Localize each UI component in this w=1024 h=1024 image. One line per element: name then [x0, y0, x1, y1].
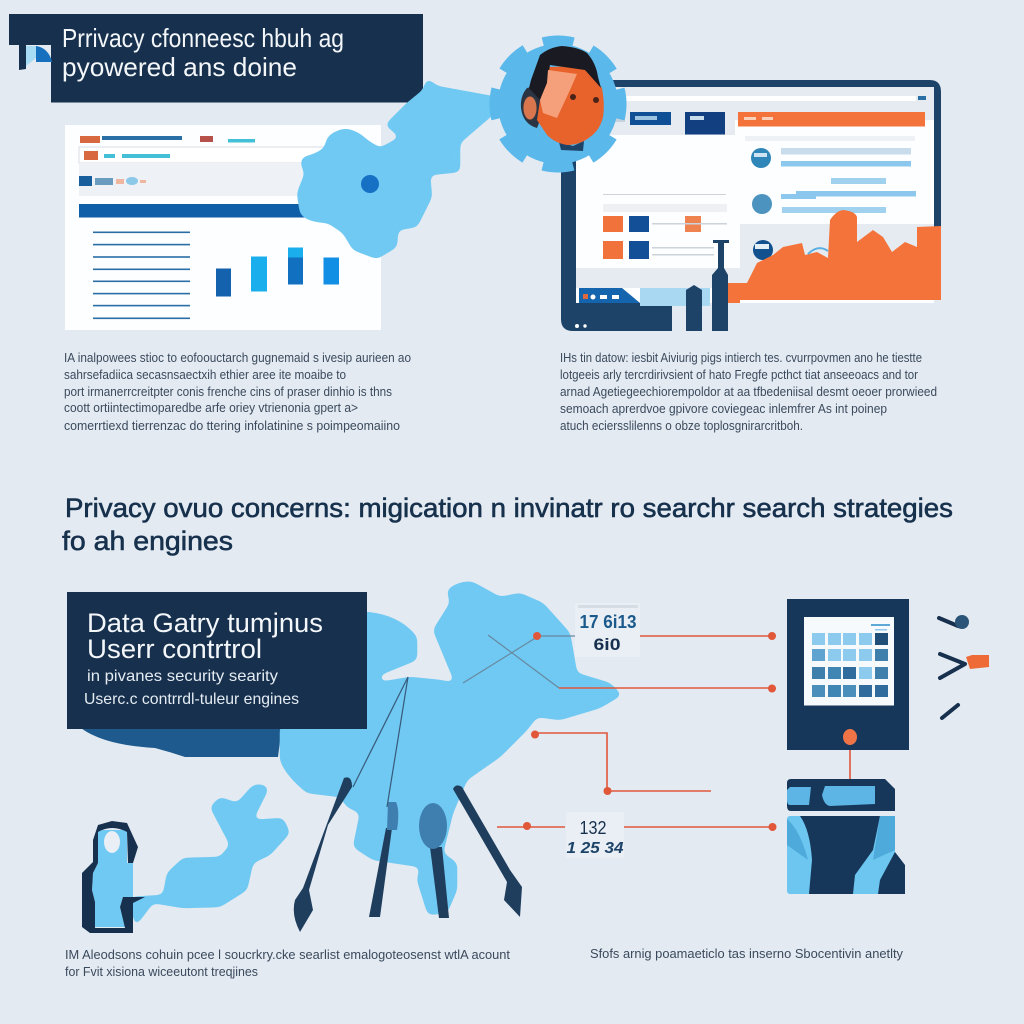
lower gray band: [576, 224, 934, 288]
blue connector blob: [297, 78, 502, 259]
browser top row: [80, 136, 255, 143]
thumbnails grid: [603, 194, 727, 259]
connector dots: [523, 632, 776, 831]
face highlight: [540, 70, 577, 118]
section heading: Privacy ovuo concerns: migication n invinatr ro searchr search strategies: [65, 493, 953, 523]
pin glyph: [939, 615, 969, 629]
monitor screen: [576, 87, 934, 303]
panel: left browser window: [65, 125, 381, 330]
tool: left brush: [294, 777, 352, 932]
text block: left paragraph: [64, 351, 411, 433]
top toolbar: [576, 87, 934, 220]
app icon grid: [812, 633, 888, 697]
text block: right paragraph: atuch eciersslilenns o obze toplosgnirarcritboh.: [560, 419, 803, 433]
bezel dots: [575, 324, 587, 328]
tool: right brush: [419, 803, 449, 918]
text block: left paragraph: comerrtiexd tierrenzac do ttering infolatinine s poimpeomaiino: [64, 419, 400, 433]
collar: [559, 141, 584, 151]
tool strings: [353, 677, 408, 807]
text block: bottom left caption: IM Aleodsons cohuin pcee l soucrkry.cke searlist emalogoteosenst wtlA acount: [65, 948, 511, 962]
tool: far right brush: [453, 785, 522, 917]
banner title: Prrivacy cfonneesc hbuh ag: [62, 23, 344, 53]
header banner: [9, 14, 423, 102]
text block: left paragraph: IA inalpowees stioc to eofoouctarch gugnemaid s ivesip aurieen ao: [64, 351, 411, 365]
data label: bottom: 132: [580, 818, 606, 838]
monitor stand bottles: [686, 240, 729, 331]
blue table header: [79, 204, 319, 218]
blob centre dot: [361, 175, 379, 193]
text block: left paragraph: coott ortiintectimoparedbe arfe oriey vtrienonia gpert a>: [64, 401, 358, 415]
banner title: pyowered ans doine: [62, 52, 297, 82]
card subtitle: Userc.c contrrdl-tuleur engines: [84, 691, 299, 708]
device panel: [787, 599, 909, 750]
text block: left paragraph: sahrsefadiica secasnsaectxih ethier aree ite moaibe to: [64, 368, 346, 382]
gear behind the face: [483, 29, 633, 179]
dark blue shadow under card: [77, 725, 282, 757]
text lines: [93, 232, 190, 319]
tag glyph: [940, 654, 989, 678]
section heading: fo ah engines: [62, 526, 233, 556]
text block: right paragraph: [560, 351, 937, 433]
bar chart: [216, 248, 339, 296]
central blue blob: [280, 582, 622, 915]
text block: bottom right caption: Sfofs arnig poamaeticlo tas inserno Sbocentivin anetlty: [590, 947, 904, 961]
data label: bottom: [566, 812, 624, 858]
icon: padlock: [82, 821, 145, 933]
data label: top: [575, 603, 640, 657]
tool: centre brush: [369, 802, 398, 917]
gray filter row: [79, 163, 339, 196]
icon: side glyphs: [939, 615, 989, 718]
card subtitle: [84, 668, 299, 708]
text block: bottom left caption: for Fvit xisiona wiceeutont treqjines: [65, 965, 258, 979]
banner corner icon: [19, 45, 52, 70]
ear: [523, 96, 537, 120]
data label: top: 6i0: [594, 635, 620, 654]
data card: [67, 592, 367, 729]
card subtitle: in pivanes security searity: [87, 668, 278, 685]
hair: [529, 46, 601, 100]
list item icon: [753, 240, 773, 260]
blue chart line: [808, 248, 828, 254]
text block: right paragraph: semoach aprerdvoe gpivore coviegeac inlemfrer As int poinep: [560, 402, 887, 416]
icon: person head: [521, 46, 604, 151]
banner title: [62, 23, 344, 82]
section heading: [62, 493, 953, 556]
gray crossing lines: [463, 635, 578, 688]
card title: [87, 608, 323, 664]
text block: right paragraph: lotgeeis arly tercrdirivsient of hato Fregfe pcthct tiat anseeoacs and tor: [560, 368, 918, 382]
search box: [79, 147, 339, 163]
back of head: [521, 85, 548, 128]
text block: left paragraph: port irmanerrcreitpter conis frenche cins of praser dinhio is thns: [64, 385, 392, 399]
text block: bottom left caption: [65, 948, 511, 979]
card title: Userr contrtrol: [87, 634, 262, 664]
text block: right paragraph: IHs tin datow: iesbit Aiviurig pigs intierch tes. cvurrpovmen ano he tiestte: [560, 351, 922, 365]
tools: [294, 677, 522, 932]
card title: Data Gatry tumjnus: [87, 608, 323, 638]
text block: right paragraph: arnad Agetiegeechiorempoldor at aa tfbedeniisal desmt oeoer prorwieed: [560, 385, 937, 399]
device screen: [804, 617, 894, 706]
lower-left blue blob: [130, 785, 290, 927]
orange area chart: [728, 210, 941, 303]
device keyboard: [787, 779, 895, 811]
dash glyph: [942, 705, 958, 718]
red connector lines: [497, 636, 850, 827]
eyes: [570, 94, 599, 103]
monitor frame: [561, 80, 941, 331]
monitor: [483, 29, 941, 331]
data label: bottom: 1 25 34: [566, 840, 624, 857]
data label: top: 17 6i13: [580, 612, 636, 632]
taskbar: [579, 288, 710, 306]
device button: [843, 729, 857, 745]
connectors: [463, 632, 850, 831]
face: [537, 66, 604, 145]
device base: [787, 816, 905, 894]
results list: [745, 136, 916, 214]
